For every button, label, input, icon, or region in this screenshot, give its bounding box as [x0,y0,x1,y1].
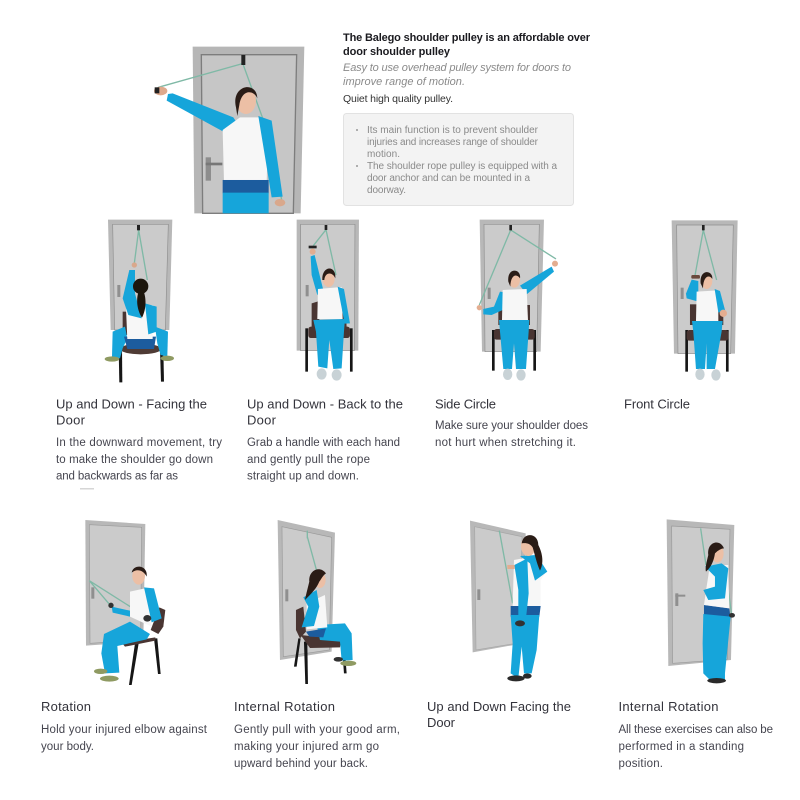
hero photo: woman using shoulder pulley on door [154,47,304,213]
text: internal rotation seated: upward behind your back. [234,758,368,770]
feature callout box: Its main function is to prevent shoulder [367,125,539,136]
text: up and down facing the door: Door [56,412,86,428]
woman on chair [105,225,174,382]
feature callout box: doorway. [367,185,406,196]
text: rotation: Hold your injured elbow against [41,724,208,736]
italic subtitle: improve range of motion. [343,76,465,88]
text: internal rotation seated: Internal Rotation [234,699,335,714]
text: up and down facing the door: Up and Down - Facing the [56,396,207,412]
woman standing [703,543,735,683]
tagline: Quiet high quality pulley. [343,93,453,105]
feature callout box: door anchor and can be mounted in a [367,173,530,184]
feature callout box: injuries and increases range of shoulder [367,137,539,148]
door [480,220,544,352]
pulley rope [158,55,282,200]
woman [154,87,285,213]
figure: front circle, seated [672,220,738,381]
text: up and down facing the door: to make the shoulder go down [56,454,213,466]
text: rotation [41,699,208,753]
rope [307,531,317,571]
rope [695,230,717,280]
feature callout box: motion. [367,149,400,160]
text: rotation: your body. [41,741,94,753]
feature callout box [344,114,574,206]
figure: up and down facing the door, standing [470,521,547,681]
text: up and down facing the door standing [427,699,571,730]
text: side circle: Make sure your shoulder does [435,420,588,432]
text: internal rotation standing: Internal Rotation [618,699,718,714]
text: side circle: not hurt when stretching it. [435,437,576,449]
woman standing [507,535,547,681]
door [193,47,304,213]
product headline: The Balego shoulder pulley is an affordable over [343,32,591,44]
text: up and down facing the door: In the downward movement, try [56,437,222,449]
rope [89,581,143,615]
rope [701,528,732,615]
product headline: door shoulder pulley [343,46,451,58]
text: internal rotation standing: performed in a standing [618,741,744,753]
door [470,521,526,652]
figure: rotation, seated side on [85,520,165,685]
text: internal rotation seated [234,699,400,770]
figure: internal rotation, seated side on [278,520,356,684]
italic subtitle [343,62,571,88]
rope [134,230,147,280]
woman on chair [294,569,356,684]
text: internal rotation seated: making your injured arm go [234,741,379,753]
text: internal rotation standing: All these exercises can also be [618,724,773,736]
feature callout box: The shoulder rope pulley is equipped with a [367,161,557,172]
text: up and down facing the door: and backwards as far as [56,470,178,482]
text: front circle: Front Circle [624,396,690,412]
text: internal rotation seated: Gently pull with your good arm, [234,724,400,736]
woman on chair [305,225,353,381]
door [297,220,359,351]
text: up and down back to the door: Door [247,412,277,428]
text: up and down facing the door [56,396,222,490]
italic subtitle: Easy to use overhead pulley system for doors to [343,62,571,74]
figure: side circle, seated [477,220,558,381]
door [672,220,738,354]
woman on chair [94,567,165,685]
text: up and down back to the door [247,396,403,482]
text: up and down facing the door standing: Up and Down Facing the [427,699,571,714]
text: rotation: Rotation [41,699,91,714]
product headline [343,32,591,58]
text: side circle: Side Circle [435,396,496,412]
door [667,519,734,666]
figure: up and down, facing the door, seated [105,220,174,382]
woman on chair [685,225,729,381]
woman on chair [477,225,558,381]
text: up and down back to the door: Grab a handle with each hand [247,437,400,449]
text: up and down back to the door: Up and Down - Back to the [247,396,403,412]
text: up and down back to the door: and gently pull the rope [247,454,370,466]
rope [499,531,513,603]
text: internal rotation standing: position. [618,758,663,770]
door [278,520,335,660]
text: up and down facing the door standing: Door [427,715,456,730]
figure: internal rotation, standing [667,519,735,683]
figure: up and down, back to the door, seated [297,220,359,381]
rope [313,230,336,275]
rope [479,230,556,305]
text: up and down back to the door: straight up and down. [247,470,359,482]
door [108,220,172,330]
door [85,520,145,646]
text: internal rotation standing [618,699,773,770]
text: side circle [435,396,588,449]
